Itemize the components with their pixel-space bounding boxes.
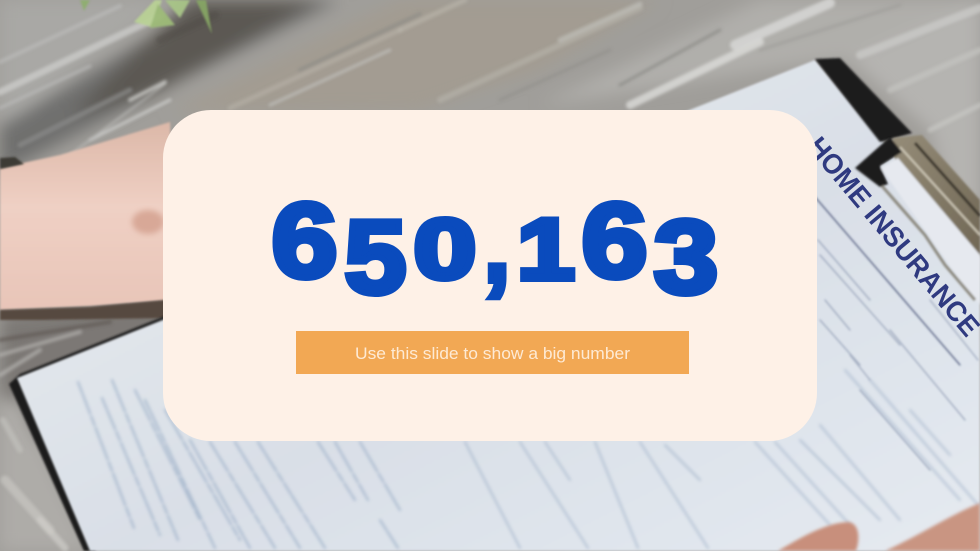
fingers at bottom right <box>778 503 980 551</box>
caption text: Use this slide to show a big number <box>355 344 630 363</box>
arm <box>0 122 175 320</box>
big number <box>271 181 718 316</box>
clipboard top strip <box>815 58 912 142</box>
plant leaves <box>80 0 212 34</box>
big number: 0 <box>414 202 476 296</box>
big number: 6 <box>581 181 648 300</box>
big number: 1 <box>517 202 575 298</box>
big number: 5 <box>345 199 406 315</box>
big number: , <box>484 187 510 304</box>
form rules and blurred text lines <box>78 197 978 548</box>
clipboard back edge <box>9 314 170 551</box>
metal clip <box>855 135 980 305</box>
big number: 3 <box>654 200 718 316</box>
main panel <box>163 110 817 441</box>
big number: 6 <box>271 181 338 300</box>
caption bar <box>296 331 689 374</box>
